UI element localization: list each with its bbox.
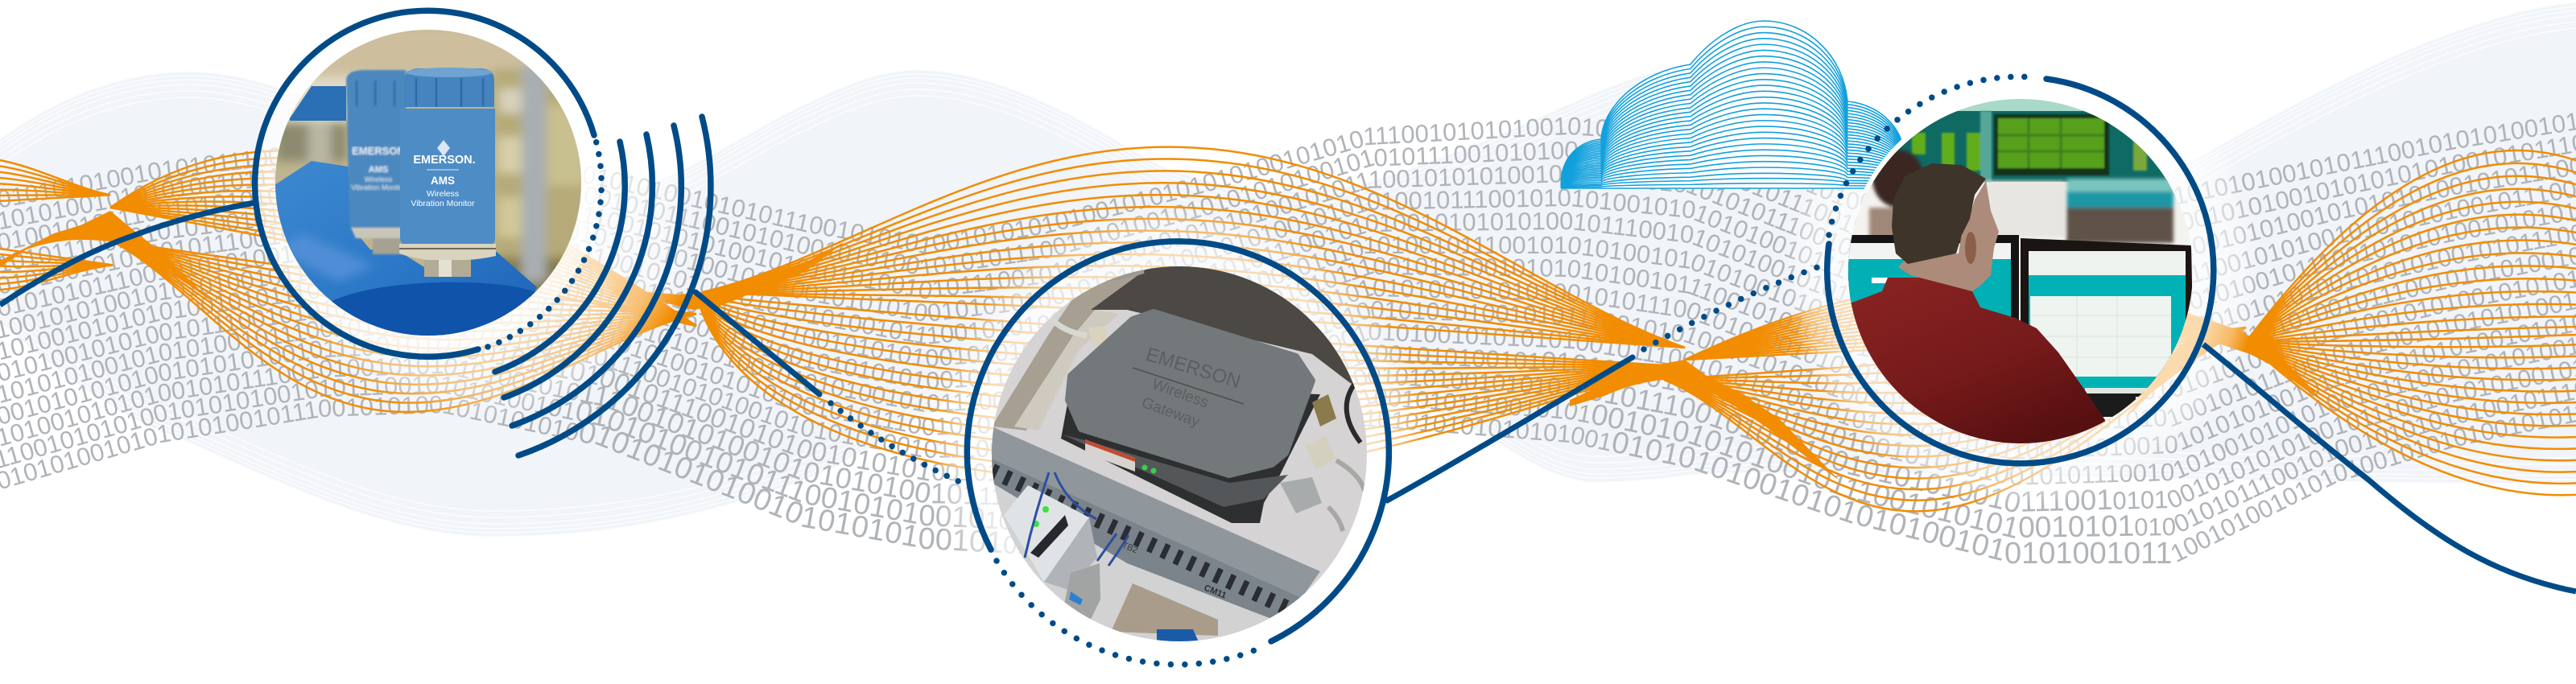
front sensor (399, 68, 496, 277)
photo: wireless vibration monitors (274, 28, 584, 337)
photo: wireless gateway: CM11 (1203, 583, 1228, 601)
photo: control room operator (1843, 97, 2198, 451)
photo: wireless gateway (990, 266, 1368, 644)
rear sensor (346, 70, 406, 254)
white fade halos around the photos (257, 0, 2260, 684)
pale wave ribbon (0, 2, 2576, 537)
ring: sensor (255, 10, 601, 356)
rear sensor: AMS (369, 165, 388, 175)
solid ribbon crossings (0, 211, 2318, 480)
photo: wireless gateway: TB2 (1121, 541, 1139, 555)
ring: control room (1827, 76, 2214, 464)
front sensor: Wireless (427, 189, 459, 199)
left monitor (1843, 235, 2019, 320)
rear sensor: Vibration Monitor (351, 183, 406, 192)
outgoing line to the right (2203, 344, 2576, 591)
blue machine body (274, 161, 537, 337)
icon: signal waves (495, 117, 711, 455)
orange lobe: control room (1640, 270, 2246, 537)
orange data ribbon (0, 99, 2576, 537)
incoming line from the left (0, 203, 254, 305)
front sensor: AMS (431, 175, 455, 187)
ring: gateway (967, 241, 1389, 665)
connector: gateway to control room (1387, 267, 1818, 501)
orange lobe: sensor (62, 99, 696, 447)
rear sensor: Wireless (365, 175, 393, 183)
orange lobe: gateway (696, 120, 1685, 524)
operator (1843, 163, 2108, 451)
orange lobe: far left (0, 146, 113, 314)
right monitor (2021, 238, 2193, 417)
white disc edge cutting the cloud (1864, 92, 2022, 190)
gateway enclosure: Wireless (1150, 376, 1211, 412)
gateway enclosure (1061, 312, 1336, 523)
gateway enclosure: EMERSON (1143, 344, 1243, 393)
icon: cloud (1561, 21, 1906, 188)
rear sensor: EMERSON (352, 145, 405, 157)
orange lobe: far right (2246, 142, 2576, 507)
wiring duct (992, 426, 1320, 598)
gateway enclosure: Gateway (1139, 394, 1202, 431)
front sensor: Vibration Monitor (411, 199, 475, 208)
connector: sensor to gateway (696, 292, 962, 483)
front sensor: EMERSON. (413, 154, 476, 167)
din rail modules (992, 483, 1284, 644)
wall monitors (1912, 111, 2147, 182)
